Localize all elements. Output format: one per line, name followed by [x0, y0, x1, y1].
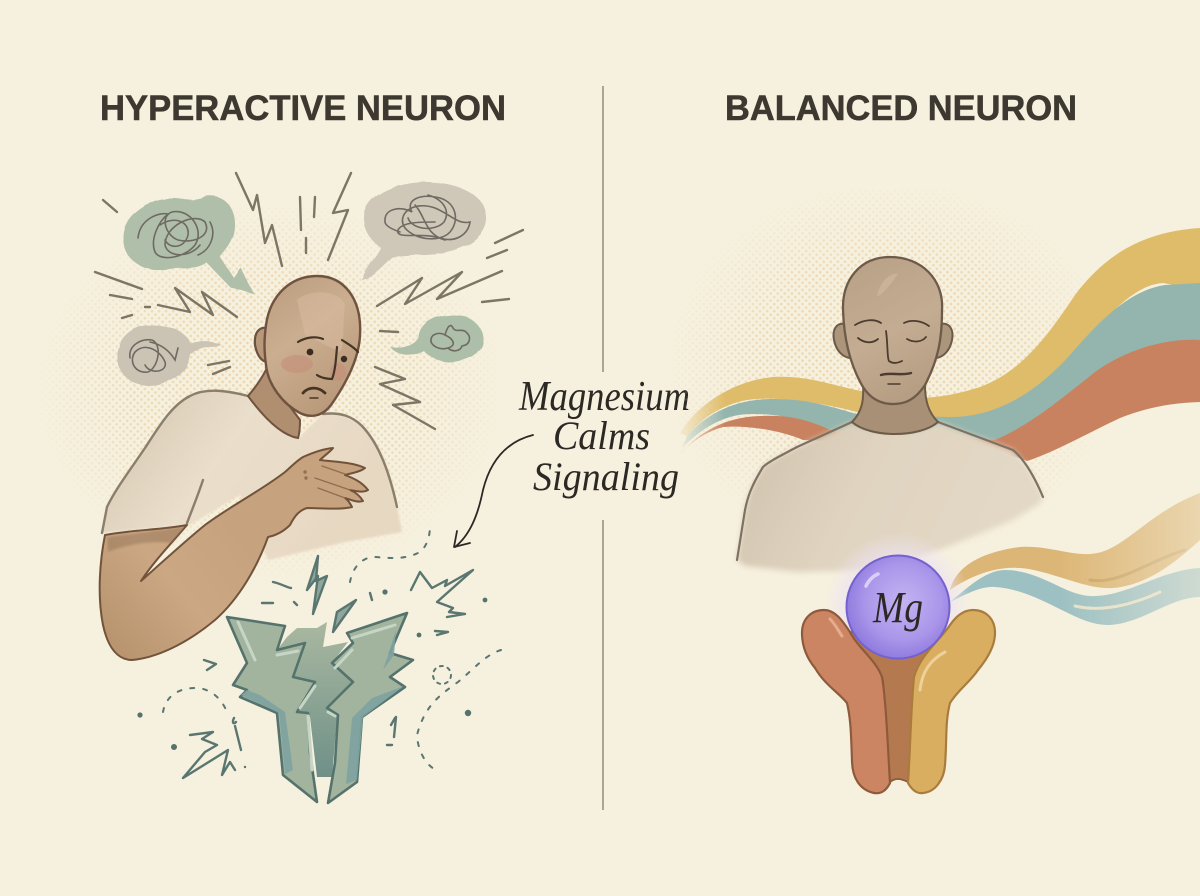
- glow: [824, 533, 972, 681]
- sleeve shadow: [107, 527, 185, 552]
- lobe highlights: [830, 619, 945, 690]
- thought bubble: green right: [390, 315, 483, 362]
- thought bubble: gray top right: [362, 182, 487, 281]
- stress lines and lightning: [95, 173, 523, 429]
- receptor left lobe: [802, 610, 890, 793]
- flowing ribbons lower: [950, 493, 1200, 625]
- figure: anxious person: [100, 276, 402, 660]
- arm: [100, 448, 368, 660]
- blue ribbon cream streak: [1075, 592, 1160, 608]
- panel: hyperactive neuron: [40, 173, 523, 803]
- figure: calm person: [737, 257, 1043, 572]
- thought bubble: green top left: [123, 196, 255, 295]
- hand detail: [304, 466, 350, 498]
- coral ribbon: [680, 340, 1200, 461]
- receptor right lobe: [908, 610, 995, 793]
- ears: [834, 324, 952, 358]
- annotation: magnesium calms signaling: Magnesium: [518, 374, 690, 420]
- face features: [855, 320, 929, 384]
- shirt: [102, 391, 402, 560]
- panel: balanced neuron: [670, 190, 1200, 793]
- blue shading and highlights: [241, 630, 404, 784]
- annotation: magnesium calms signaling: [518, 374, 690, 499]
- receptor: [802, 610, 995, 793]
- arrow: to broken neuron: [454, 435, 533, 547]
- broken neuron: [137, 525, 501, 803]
- neck: [248, 368, 300, 438]
- face highlight: [297, 292, 345, 352]
- halftone glow left: [53, 215, 488, 566]
- yellow ribbon: [680, 228, 1200, 436]
- highlights: [238, 622, 395, 770]
- flowing ribbons upper: [680, 228, 1200, 461]
- tan ribbon: [950, 493, 1200, 590]
- dotted paths: [163, 525, 501, 771]
- shirt: [737, 422, 1043, 572]
- heading: hyperactive neuron: HYPERACTIVE NEURON: [100, 89, 506, 128]
- center divider: [602, 86, 604, 810]
- right fragment: [327, 613, 413, 803]
- ear: [255, 328, 270, 362]
- magnesium ion: Mg: [872, 583, 923, 632]
- spark dots: [137, 589, 487, 768]
- annotation: magnesium calms signaling: Calms: [553, 413, 650, 458]
- halftone glow right: [672, 194, 1079, 495]
- head: [264, 276, 360, 416]
- magnesium ion: [846, 556, 950, 658]
- ribbon streak: [1090, 550, 1185, 581]
- head: [843, 257, 942, 404]
- receptor center: [848, 632, 950, 782]
- face highlight: [877, 274, 898, 296]
- left fragment: [227, 617, 317, 802]
- annotation: magnesium calms signaling: Signaling: [533, 454, 679, 499]
- sparks: [183, 556, 473, 778]
- cheek blush: [281, 355, 346, 381]
- thought bubble: gray left: [117, 325, 221, 386]
- teal ribbon: [682, 283, 1200, 448]
- heading: balanced neuron: BALANCED NEURON: [725, 89, 1077, 128]
- blue ribbon: [950, 568, 1200, 625]
- neck: [852, 385, 938, 434]
- core: [277, 622, 353, 777]
- face features: [298, 337, 358, 398]
